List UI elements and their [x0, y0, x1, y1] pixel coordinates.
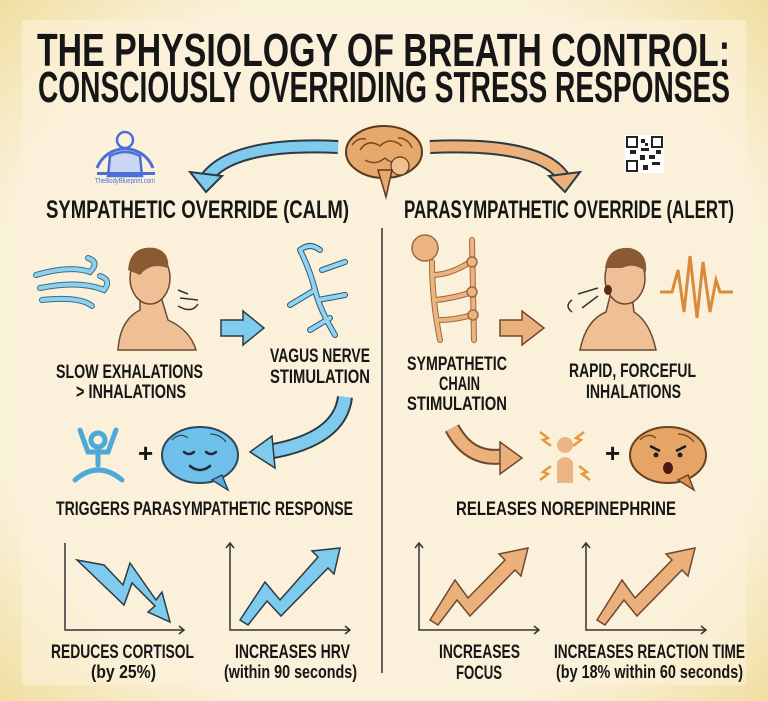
- title: [37, 24, 730, 112]
- label: reduces cortisol: (by 25%): [91, 662, 156, 682]
- label: reduces cortisol: REDUCES CORTISOL: [51, 642, 194, 663]
- icon: angry brain: [630, 427, 706, 490]
- label: slow exhalations: > INHALATIONS: [76, 382, 186, 403]
- icon: calm brain: [162, 427, 238, 490]
- icon: wind: [36, 258, 107, 306]
- label: vagus nerve stimulation: VAGUS NERVE: [270, 346, 370, 367]
- label: sympathetic chain stimulation: STIMULATION: [407, 394, 507, 415]
- chart: reduces cortisol: [65, 543, 184, 634]
- chart: increases HRV: [226, 543, 350, 634]
- icon: zigzag wave: [660, 256, 733, 318]
- label: increases focus: INCREASES: [439, 642, 520, 663]
- icon: sympathetic chain: [432, 240, 474, 340]
- label: sympathetic chain stimulation: [407, 354, 507, 415]
- label: increases reaction time: [554, 642, 745, 682]
- label: sympathetic chain stimulation: CHAIN: [439, 374, 480, 395]
- label: slow exhalations: SLOW EXHALATIONS: [56, 362, 203, 383]
- icon: meditating figure: [75, 430, 122, 480]
- chart: increases reaction time: [582, 543, 706, 634]
- label: rapid forceful inhalations: INHALATIONS: [586, 382, 681, 403]
- icon: alert figure with lightning: [540, 432, 590, 483]
- panel: alert: [407, 235, 745, 684]
- arrow: curved blue down-left: [250, 397, 345, 468]
- label: increases HRV: INCREASES HRV: [235, 642, 350, 663]
- logo: TheBodyBlueprint.com: [95, 178, 155, 185]
- icon: vagus nerve: [290, 246, 345, 335]
- icon: man inhaling: [568, 248, 656, 350]
- label: increases focus: FOCUS: [456, 663, 502, 684]
- plus: +: [605, 438, 620, 468]
- label: releases norepinephrine: RELEASES NOREPINEPHRINE: [456, 499, 676, 520]
- icon: man exhaling: [118, 248, 198, 350]
- plus: +: [138, 438, 153, 468]
- arrow: right blue: [221, 311, 264, 345]
- label: sympathetic chain stimulation: SYMPATHETIC: [407, 354, 507, 375]
- label: increases focus: [439, 642, 520, 684]
- label: reduces cortisol: [51, 642, 194, 682]
- label: vagus nerve stimulation: STIMULATION: [270, 367, 370, 388]
- label: rapid forceful inhalations: RAPID, FORCEFUL: [569, 361, 696, 382]
- icon: brain center: [346, 126, 422, 197]
- label: triggers parasympathetic response: TRIGGERS PARASYMPATHETIC RESPONSE: [56, 499, 353, 520]
- panel: calm: [36, 246, 370, 682]
- label: rapid forceful inhalations: [569, 361, 696, 403]
- arrow: blue to left: [190, 146, 338, 192]
- arrow: orange to right: [430, 146, 580, 192]
- label: increases HRV: [224, 642, 357, 682]
- label: slow exhalations: [56, 362, 203, 403]
- logo: [95, 132, 155, 185]
- chart: increases focus: [415, 543, 539, 634]
- label: increases HRV: (within 90 seconds): [224, 662, 357, 682]
- arrow: right orange: [500, 311, 544, 345]
- heading: sympathetic override: SYMPATHETIC OVERRIDE (CALM): [46, 196, 349, 224]
- icon: QR code: [625, 135, 664, 173]
- arrow: curved orange down-right: [452, 428, 522, 474]
- label: vagus nerve stimulation: [270, 346, 370, 388]
